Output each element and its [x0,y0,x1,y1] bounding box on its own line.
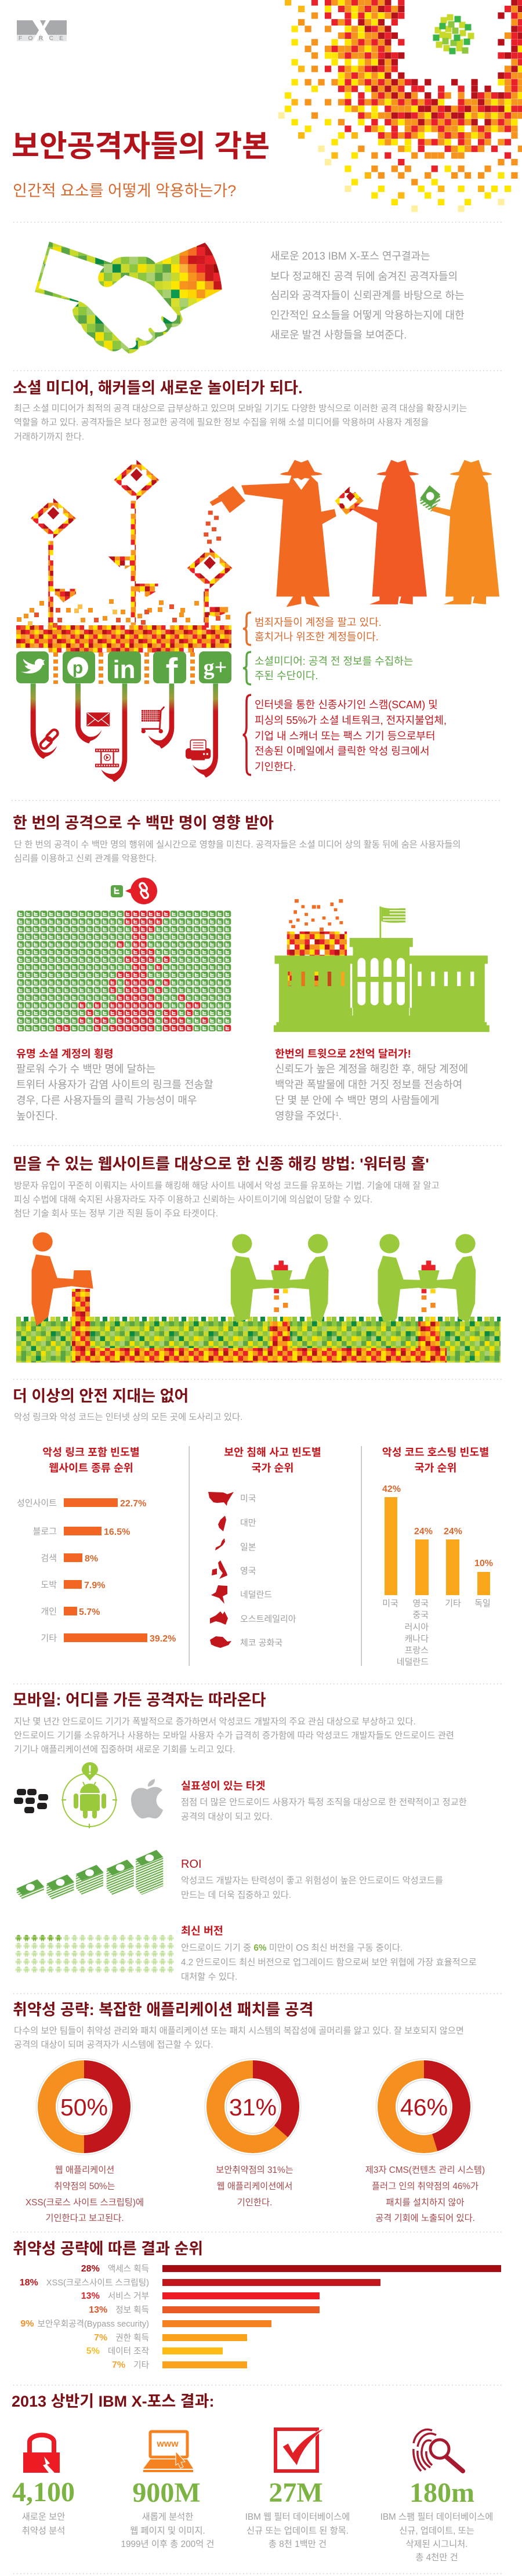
intro text: 인간적인 요소들을 어떻게 악용하는지에 대한 [270,310,465,321]
bar: bypass security: 9% 보안우회공격(Bypass security) [20,2319,149,2329]
heading: no safe zone: 더 이상의 안전 지대는 없어 [13,1387,188,1405]
callout: social media as recon: 소셜미디어: 공격 전 정보를 수집하는 [255,655,413,667]
text: target with accuracy: 공격의 대상이 되고 있다. [181,1812,273,1822]
panel text: 200 billion dollar tweet: 한번의 트윗으로 2천억 달러가! [275,1048,411,1060]
illustration: green field poisoned at watering holes [16,1232,501,1363]
bar: search: 검색 [41,1553,57,1563]
text: target with accuracy: 실표성이 있는 타겟 [181,1780,266,1792]
panel text: celebrity account hijack: 높아진다. [16,1110,57,1122]
callout: accounts sold: 범죄자들이 계정을 팔고 있다. [255,617,382,628]
paragraph: mobile [14,1717,454,1755]
stat: 900M with laptop icon [121,2432,215,2549]
bar: personal: 개인 [41,1607,57,1617]
bar: Germany [474,1559,493,1608]
icon: checkmark in box [276,2428,325,2471]
icon: fax printer [186,740,211,760]
illustration: three criminals trading accounts [204,460,499,607]
text: ROI: 악성코드 개발자는 탄력성이 좋고 위험성이 높은 안드로이드 악성코드를 [181,1876,443,1886]
green visitors right pair [378,1234,476,1323]
country: Japan [215,1538,256,1552]
caption: security vulnerability 31 percent: 웹 애플리케이션에서 [217,2182,292,2191]
panel text: 200 billion dollar tweet: 신뢰도가 높은 계정을 해킹한 후, 해당 계정에 [275,1063,468,1075]
icon: pinterest: p [72,658,83,677]
icon: film strip [95,749,119,767]
text: latest version: 대처할 수 있다. [181,1972,237,1982]
icon: linkedin [108,651,141,684]
social media paragraph [14,404,467,442]
icon: chain link [39,729,59,750]
bar: USA: 미국 [382,1599,398,1608]
callout: social media as recon [255,655,413,682]
bracket: green [243,652,251,684]
icon grid: android versions 6 percent [14,1934,175,1973]
social media paragraph: 최근 소셜 미디어가 최적의 공격 대상으로 급부상하고 있으며 모바일 기기도 다양한 방식으로 이러한 공격 대상을 확장시키는 [14,404,467,414]
bar: UK China Russia Canada France Netherlands: 영국 [412,1599,429,1608]
bar: denial of service [81,2291,320,2301]
bar: adult sites: 성인사이트 [17,1498,57,1508]
callout: scam and phishing: 피싱의 55%가 소셜 네트워크, 전자지불업체, [255,715,447,726]
icon: google plus [199,651,231,683]
bar: adult sites [17,1498,146,1509]
chart: countries hosting malicious code: 악성 코드 호스팅 빈도별 [382,1446,489,1458]
panel text: celebrity account hijack: 유명 소셜 계정의 횡령 [16,1048,114,1060]
stat: 4,100 with lock icon: 새로운 보안 [22,2512,65,2522]
paragraph: mobile: 기기나 애플리케이션에 집중하며 새로운 기회를 노리고 있다. [14,1745,235,1755]
paragraph: mobile: 안드로이드 기기를 소유하거나 사용하는 모바일 사용자 수가 급격히 증가함에 따라 악성코드 개발자들도 안드로이드 관련 [14,1731,454,1741]
paragraph: watering hole: 피싱 수법에 대해 숙지된 사용자라도 자주 이용하고 신뢰하는 사이트이기에 의심없이 당할 수 있다. [14,1195,372,1205]
stat: 180m with fingerprint icon [380,2429,493,2563]
bar: UK China Russia Canada France Netherlands: 캐나다 [405,1634,429,1644]
heading: social media: 소셜 미디어, 해커들의 새로운 놀이터가 되다. [13,379,303,397]
bar: gambling: 7.9% [84,1581,105,1590]
paragraph: one attack [14,840,461,864]
twitter user grid with infection spreading [17,910,231,1032]
country: UK [212,1560,256,1579]
callout: scam and phishing: 전송된 이메일에서 클릭한 악성 링크에서 [255,745,430,757]
bar: Germany: 10% [474,1559,493,1568]
bar: gain privileges: 7% 권한 획득 [94,2333,149,2343]
social media paragraph: 거래하기까지 한다. [14,432,84,442]
heading: vulnerability exploits: 취약성 공략: 복잡한 애플리케이션 패치를 공격 [13,2001,313,2019]
green pixel blob [436,17,471,51]
paragraph: mobile: 지난 몇 년간 안드로이드 기기가 폭발적으로 증가하면서 악성코드 개발자의 주요 관심 대상으로 부상하고 있다. [14,1717,416,1727]
icon: linkedin: in [113,655,136,684]
bar: gambling [41,1580,105,1590]
panel text: 200 billion dollar tweet: 영향을 주었다 [275,1110,335,1122]
country: Japan: 일본 [240,1542,256,1552]
heading: mobile: 모바일: 어디를 가든 공격자는 따라온다 [13,1691,266,1709]
x-force logo: FORCE [19,35,70,42]
donut chart: 46 percent [376,2059,472,2155]
caption: web application 50 percent: 웹 애플리케이션 [55,2165,114,2175]
bar: gain information [89,2305,320,2315]
bar: other [444,1527,462,1608]
icon: fingerprint under magnifier [414,2429,463,2471]
chart: website types with malicious links: 웹사이트 종류 순위 [49,1462,133,1474]
icon: pinterest [63,651,95,683]
bar: blogs: 16.5% [104,1527,130,1537]
paragraph: vulnerability exploits: 다수의 보안 팀들이 취약성 관리와 패치 애플리케이션 또는 패치 시스템의 복잡성에 골머리를 앓고 있다. 잘 보호되지 않으면 [14,2026,464,2036]
paragraph: one attack: 단 한 번의 공격이 수 백만 명의 행위에 실시간으로 영향을 미친다. 공격자들은 소셜 미디어 상의 활동 뒤에 숨은 사용자들의 [14,840,461,850]
country: Taiwan: 대만 [240,1518,256,1528]
x-force logo [17,20,70,42]
icon: broken lock [23,2435,60,2473]
panel text: 200 billion dollar tweet: 1 [335,1111,339,1118]
text: latest version [181,1925,477,1982]
bar: search [41,1553,98,1564]
panel text: 200 billion dollar tweet [275,1048,468,1122]
stat: 27M with check icon: 27M [269,2477,323,2508]
country: Australia: 오스트레일리아 [240,1614,296,1624]
caption: web application 50 percent: XSS(크로스 사이트 스크립팅)에 [26,2198,144,2208]
title: 보안공격자들의 각본 [12,130,270,164]
panel text: 200 billion dollar tweet: . [339,1110,342,1122]
bar: other: 기타 [445,1599,461,1608]
stat: 180m with fingerprint icon: IBM 스팸 필터 데이터베이스에 [380,2512,493,2522]
bracket: orange [243,613,251,645]
criminal with watering can [210,460,336,607]
icon: laptop www [143,2432,193,2472]
chart: countries by breach frequency: 국가 순위 [252,1462,293,1474]
paragraph: watering hole [14,1181,440,1219]
chart: website types with malicious links [17,1446,176,1644]
caption: third party CMS 46 percent: 제3자 CMS(컨텐츠 관리 시스템) [365,2165,485,2175]
icon: android in target with alert: ! [88,1763,92,1777]
bar: other: 24% [444,1527,462,1537]
caption: third party CMS 46 percent: 패치를 설치하지 않아 [386,2198,465,2208]
bar: blogs: 블로그 [33,1527,57,1537]
bar: gambling: 도박 [41,1580,57,1590]
paragraph: one attack: 심리를 이용하고 신뢰 관계를 악용한다. [14,854,157,864]
icon: twitter [16,651,49,683]
caption: third party CMS 46 percent [365,2165,485,2223]
callout: accounts sold: 훔치거나 위조한 계정들이다. [255,631,379,643]
social media paragraph: 역할을 하고 있다. 공격자들은 보다 정교한 공격에 필요한 정보 수집을 위해 소셜 미디어를 악용하며 사용자 계정을 [14,418,429,427]
icon: growing money stacks [17,1850,163,1900]
callout: scam and phishing: 기업 내 스캐너 또는 팩스 기기 등으로부터 [255,730,436,742]
chart: countries hosting malicious code: 국가 순위 [415,1462,456,1474]
text: ROI: 만드는 데 더욱 집중하고 있다. [181,1890,291,1900]
chart: exploit result ranking [20,2264,501,2370]
stat: 900M with laptop icon: 900M [132,2477,201,2508]
bar: personal [41,1607,100,1617]
text: ROI [181,1858,443,1900]
stat: 27M with check icon [245,2428,350,2549]
criminal buying account [353,460,427,604]
stat: 4,100 with lock icon: 4,100 [12,2477,75,2508]
watering drops [204,510,221,544]
country: Australia [210,1611,296,1625]
bar: UK China Russia Canada France Netherlands: 프랑스 [405,1646,429,1655]
text: latest version: 안드로이드 기기 중 6% 미만이 OS 최신 버전을 구동 중이다. [181,1943,403,1953]
stat: 27M with check icon: IBM 웹 필터 데이터베이스에 [245,2512,350,2522]
bar: Germany: 독일 [474,1599,491,1608]
stolen account diamond [335,487,364,515]
icon: tweet with malicious link bubble [111,878,157,904]
stat: 900M with laptop icon: 웹 페이지 및 이미지. [130,2526,205,2536]
poison in pot left [274,1260,288,1294]
bar: search: 8% [85,1554,98,1564]
bar: other: 7% 기타 [112,2360,150,2370]
bar: UK China Russia Canada France Netherlands: 중국 [412,1610,429,1620]
green visitors left pair [231,1234,329,1323]
paragraph: watering hole: 첨단 기술 회사 또는 정부 기관 직원 등이 주요 타겟이다. [14,1209,218,1219]
bar: data manipulation: 5% 데이터 조작 [86,2346,149,2356]
bar: gain information: 13% 정보 획득 [89,2305,149,2315]
cash bundle [420,486,440,512]
donut chart: 50 percent [36,2059,132,2155]
icon: facebook: f [166,651,178,691]
callout: scam and phishing: 기인한다. [255,761,296,773]
stat: 180m with fingerprint icon: 180m [409,2477,474,2508]
intro text: 새로운 발견 사항들을 보여준다. [270,329,407,341]
heading: ranking of exploit results: 취약성 공략에 따른 결과 순위 [13,2240,203,2258]
bar: bypass security [20,2319,271,2329]
chart: countries by breach frequency [208,1446,321,1648]
icon: android in target with alert [61,1762,117,1828]
subtitle: 인간적 요소를 어떻게 악용하는가? [13,182,236,200]
panel text: celebrity account hijack [16,1048,213,1122]
bar: UK China Russia Canada France Netherlands [397,1527,433,1667]
stat: 180m with fingerprint icon: 총 4천만 건 [415,2553,458,2563]
bar: gain privileges [94,2333,247,2343]
caption: web application 50 percent: 기인한다고 보고된다. [45,2213,124,2223]
orange attacker pouring [32,1232,93,1327]
caption: web application 50 percent [26,2165,144,2223]
donut chart: 31 percent: 31% [229,2094,277,2121]
intro text: 새로운 2013 IBM X-포스 연구결과는 [270,251,430,262]
bar: gain access [81,2264,501,2274]
heading: first half 2013 results: 2013 상반기 IBM X-포스 결과: [12,2393,214,2410]
text: target with accuracy [181,1780,467,1822]
caption: third party CMS 46 percent: 플러그 인의 취약점의 46%가 [372,2182,478,2191]
bracket: red [243,695,251,775]
callout: scam and phishing: 인터넷을 통한 신종사기인 스캠(SCAM) 및 [255,699,438,711]
paragraph: vulnerability exploits [14,2026,464,2050]
text: latest version: 최신 버전 [181,1925,223,1937]
stat: 900M with laptop icon: 새롭게 분석한 [142,2512,193,2522]
icon: blackberry [14,1789,48,1813]
country: Czech Republic: 체코 공화국 [240,1638,282,1648]
country: USA: 미국 [240,1494,256,1503]
text: target with accuracy: 점점 더 많은 안드로이드 사용자가 특정 조직을 대상으로 한 전략적이고 정교한 [181,1798,467,1807]
bar: adult sites: 22.7% [120,1499,146,1509]
white house illustration with fire [274,899,490,1032]
bar: other [112,2360,247,2370]
bar: personal: 5.7% [79,1607,100,1617]
bar: gain access: 28% 액세스 획득 [81,2264,149,2274]
icon: shopping cart [142,707,164,733]
poison in pot right [422,1260,436,1294]
bar: XSS [20,2278,380,2288]
stat: 180m with fingerprint icon: 신규, 업데이트, 또는 [399,2526,474,2536]
caption: security vulnerability 31 percent [216,2165,293,2208]
stat: 4,100 with lock icon [12,2435,75,2536]
panel text: celebrity account hijack: 트위터 사용자가 감염 사이트의 링크를 전송할 [16,1079,213,1090]
heading: one attack millions affected: 한 번의 공격으로 수 백만 명이 영향 받아 [13,814,274,832]
criminal paying cash [431,460,499,604]
paragraph: no safe zone: 악성 링크와 악성 코드는 인터넷 상의 모든 곳에 도사리고 있다. [14,1412,242,1422]
panel text: 200 billion dollar tweet: 백악관 폭발물에 대한 거짓 정보를 전송하여 [275,1079,462,1090]
bar: UK China Russia Canada France Netherlands: 24% [414,1527,433,1537]
social network icons and hooks [16,651,231,782]
panel text: 200 billion dollar tweet: 단 몇 분 안에 수 백만 명의 사람들에게 [275,1095,439,1106]
stat: 27M with check icon: 총 8천 1백만 건 [269,2539,327,2549]
pixel fire artwork [281,2,521,209]
callout: scam and phishing [255,699,447,773]
bar: data manipulation [86,2346,223,2356]
heading: watering hole: 믿을 수 있는 웹사이트를 대상으로 한 신종 해킹 방법: '워터링 홀' [13,1155,429,1173]
bar: UK China Russia Canada France Netherlands: 네덜란드 [397,1657,429,1667]
stat: 27M with check icon: 신규 또는 업데이트 된 항목. [246,2526,349,2536]
country: Netherlands [211,1585,272,1604]
donut chart: 46 percent: 46% [400,2094,448,2121]
icon: facebook [153,651,186,691]
paragraph: watering hole: 방문자 유입이 꾸준히 이뤄지는 사이트를 해킹해 해당 사이트 내에서 악성 코드를 유포하는 기법. 기술에 대해 잘 알고 [14,1181,440,1191]
country: Czech Republic [210,1636,282,1648]
donut chart: 50 percent: 50% [60,2094,108,2121]
stat: 4,100 with lock icon: 취약성 분석 [22,2526,65,2536]
icon: laptop www: www [156,2439,179,2449]
illustration: planted malicious links [16,460,233,684]
panel text: celebrity account hijack: 경우, 다른 사용자들의 클릭 가능성이 매우 [16,1095,197,1106]
callout: accounts sold [255,617,382,643]
panel text: celebrity account hijack: 팔로워 수가 수 백만 명에 달하는 [16,1063,155,1075]
country: Netherlands: 네덜란드 [240,1590,272,1600]
bar: USA: 42% [382,1484,401,1494]
stat: 900M with laptop icon: 1999년 이후 총 200억 건 [121,2539,215,2549]
country: USA [208,1492,256,1506]
callout: social media as recon: 주된 수단이다. [255,670,318,682]
chart: countries by breach frequency: 보안 침해 사고 빈도별 [224,1446,321,1458]
stat: 180m with fingerprint icon: 삭제된 시그니처. [405,2539,468,2549]
bar: XSS: 18% XSS(크로스사이트 스크립팅) [20,2278,149,2288]
bar: other: 39.2% [150,1634,176,1644]
country: Taiwan [218,1516,256,1531]
intro text: 보다 정교해진 공격 뒤에 숨겨진 공격자들의 [270,270,458,282]
chart: website types with malicious links: 악성 링크 포함 빈도별 [42,1446,140,1458]
country: UK: 영국 [240,1566,256,1576]
caption: web application 50 percent: 취약점의 50%는 [54,2182,115,2191]
bar: blogs [33,1527,130,1537]
intro text [270,251,465,341]
icon: apple [131,1779,163,1818]
icon: envelope [86,712,110,726]
donut chart: 31 percent [205,2059,301,2155]
icon: handshake [35,241,222,354]
bar: other [41,1633,176,1644]
caption: third party CMS 46 percent: 공격 기회에 노출되어 있다. [375,2213,475,2223]
bar: USA [382,1484,401,1608]
text: latest version: 4.2 안드로이드 최신 버전으로 업그레이드 함으로써 보안 위협에 가장 효율적으로 [181,1958,477,1968]
bar: other: 기타 [41,1633,57,1643]
caption: security vulnerability 31 percent: 보안취약점의 31%는 [216,2165,293,2175]
bar: UK China Russia Canada France Netherlands: 러시아 [405,1622,429,1632]
bar: denial of service: 13% 서비스 거부 [81,2291,149,2301]
caption: security vulnerability 31 percent: 기인한다. [237,2198,272,2208]
chart: countries hosting malicious code [382,1446,493,1667]
paragraph: vulnerability exploits: 공격의 대상이 되며 공격자가 시스템에 접근할 수 있다. [14,2040,213,2050]
intro text: 심리와 공격자들이 신뢰관계를 바탕으로 하는 [270,290,465,302]
icon: google plus: g+ [204,655,227,680]
text: ROI: ROI [181,1858,202,1871]
